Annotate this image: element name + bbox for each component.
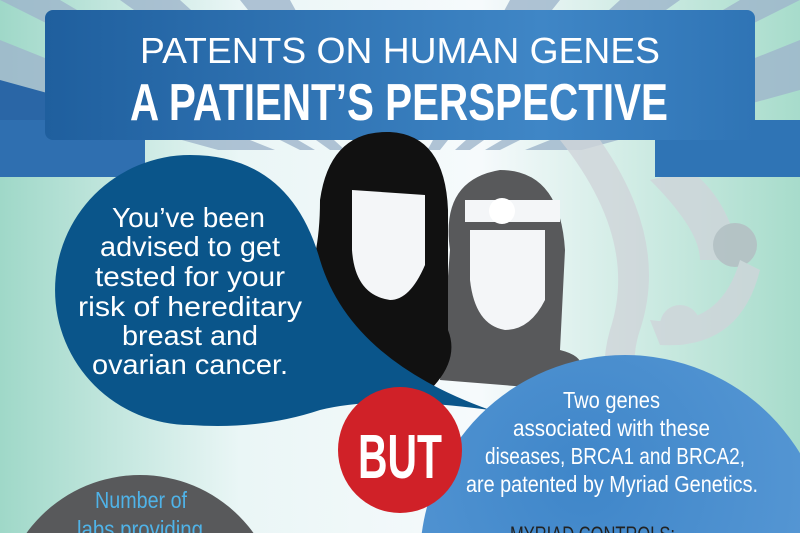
speech bubble: advised: risk of hereditary — [78, 291, 302, 322]
BUT badge: BUT — [358, 423, 442, 492]
speech bubble: advised: You’ve been — [112, 202, 265, 233]
circle: labs: Number of — [95, 487, 188, 513]
speech bubble: advised: breast and — [122, 320, 258, 351]
dna decoration — [560, 140, 760, 356]
circle: patents: Two genes — [563, 387, 660, 413]
patient figure — [316, 132, 452, 386]
speech bubble: advised — [55, 155, 490, 426]
speech bubble: advised: ovarian cancer. — [92, 349, 288, 380]
doctor figure — [440, 170, 581, 390]
title banner — [45, 10, 755, 140]
speech bubble: advised: advised to get — [100, 231, 280, 262]
title banner: PATENTS ON HUMAN GENES — [140, 30, 660, 71]
circle: patents — [420, 355, 800, 533]
circle: patents: associated with these — [513, 415, 710, 441]
circle: patents: diseases, BRCA1 and BRCA2, — [485, 443, 745, 469]
BUT badge — [338, 387, 462, 513]
circle: labs — [26, 475, 254, 533]
circle: patents: are patented by Myriad Genetics. — [466, 471, 758, 497]
speech bubble: advised: tested for your — [95, 261, 285, 292]
ribbon tails — [0, 80, 800, 177]
